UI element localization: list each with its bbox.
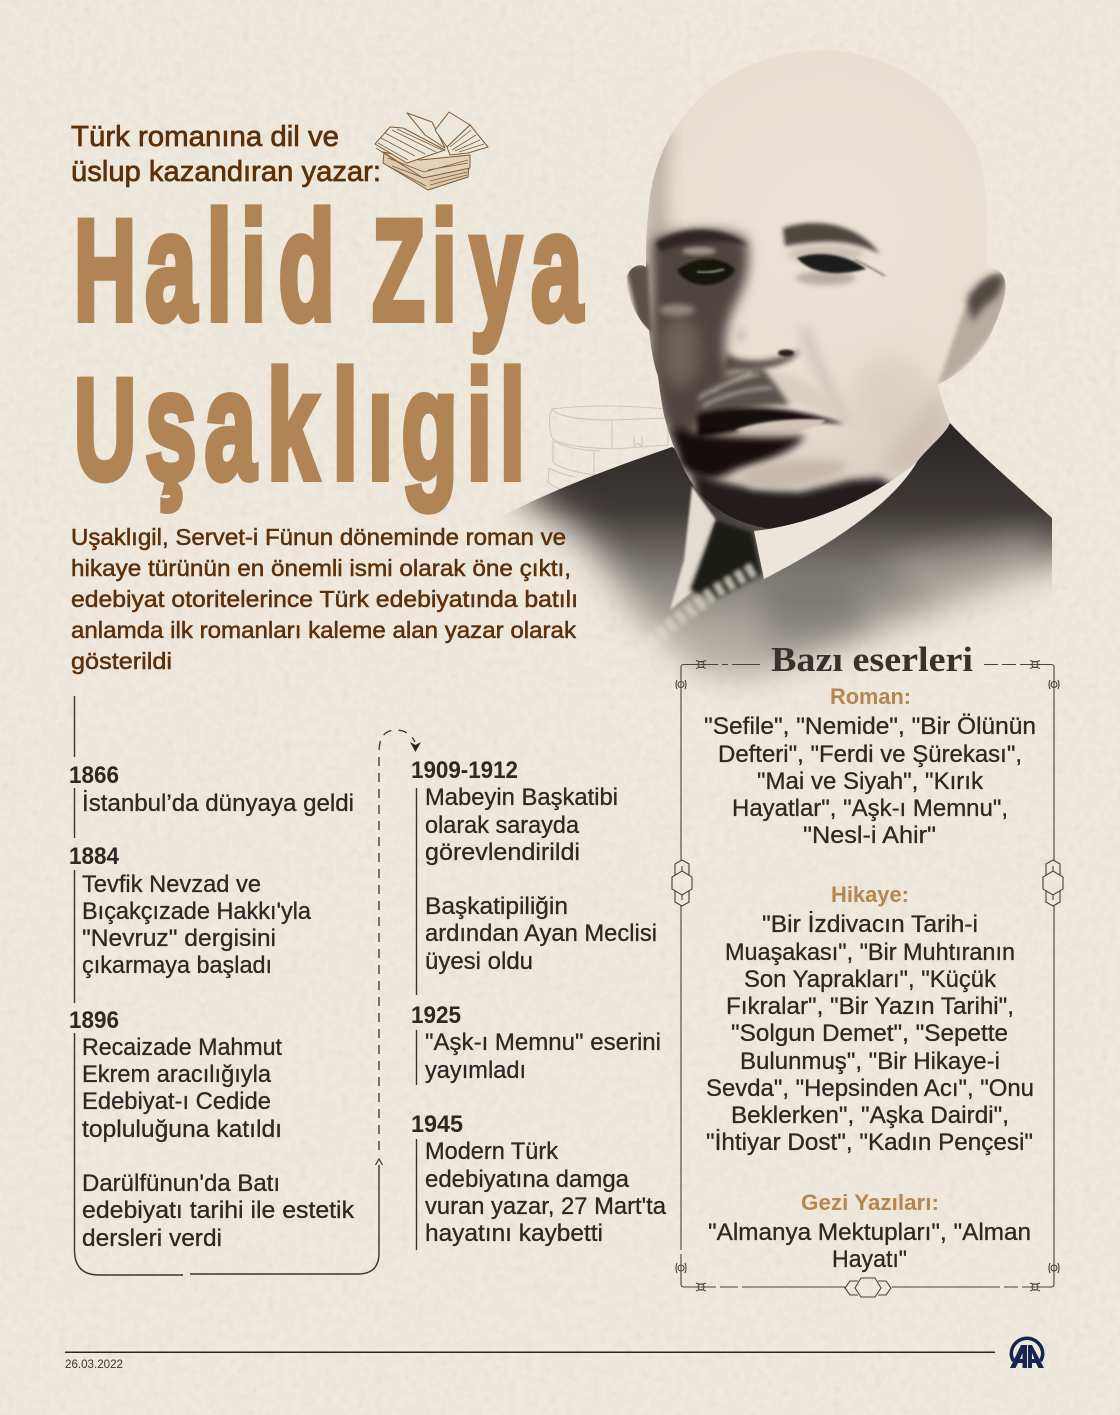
- story list: [706, 882, 1034, 1156]
- neck shade: [886, 394, 948, 472]
- title: Halid Ziya Uşaklıgil: k: [267, 339, 319, 511]
- lead heading: [71, 121, 381, 188]
- story list: "İhtiyar Dost", "Kadın Pençesi": [706, 1129, 1033, 1156]
- left side of face shadow: socket, cheek: [650, 230, 748, 452]
- 1884 entry: 1884: [69, 843, 120, 870]
- timeline column 1: [69, 762, 355, 1252]
- lead heading: Türk romanına dil ve: [71, 121, 339, 153]
- chin and jaw dark: [687, 470, 894, 529]
- title: Halid Ziya Uşaklıgil: a: [145, 180, 198, 352]
- 1909-1912 entry: [411, 757, 657, 975]
- roman list: Defteri", "Ferdi ve Şürekası",: [718, 741, 1022, 768]
- timeline column 2: [411, 757, 667, 1247]
- suit shoulder sheen: [886, 520, 1050, 603]
- story list: Son Yaprakları", "Küçük: [744, 966, 997, 993]
- title: Halid Ziya Uşaklıgil: ş: [145, 339, 197, 511]
- 1945 entry: hayatını kaybetti: [425, 1220, 603, 1247]
- title: Halid Ziya Uşaklıgil: i: [467, 339, 492, 511]
- story list: Bulunmuş", "Bir Hikaye-i: [740, 1048, 1000, 1075]
- title: Halid Ziya Uşaklıgil: H: [74, 190, 136, 350]
- left cheek mid tone: [660, 316, 700, 388]
- works panel: [704, 640, 1036, 1273]
- lower lip: [735, 419, 826, 434]
- right ear inner dark: [967, 275, 1004, 322]
- icon: AA logo: [1010, 1336, 1044, 1368]
- 1866 entry: [69, 762, 354, 817]
- story list: Beklerken", "Aşka Dairdi",: [731, 1102, 1009, 1129]
- title: Halid Ziya Uşaklıgil: ı: [368, 339, 393, 511]
- 1945 entry: vuran yazar, 27 Mart'ta: [425, 1193, 667, 1220]
- 1896 entry: 1896: [69, 1007, 119, 1034]
- title: Halid Ziya Uşaklıgil: i: [241, 180, 266, 352]
- lapel shadow: [760, 575, 880, 665]
- 1909-1912 entry: üyesi oldu: [425, 948, 533, 975]
- left cheek lit patch: [659, 304, 695, 316]
- upper lip dark: [697, 408, 844, 438]
- head and face: [620, 40, 1020, 540]
- 1945 entry: Modern Türk: [425, 1138, 559, 1165]
- 1884 entry: çıkarmaya başladı: [82, 952, 272, 979]
- right page block: [447, 125, 488, 155]
- 1925 entry: yayımladı: [425, 1057, 526, 1084]
- intro paragraph: anlamda ilk romanları kaleme alan yazar olarak: [71, 617, 577, 643]
- top book: [383, 152, 470, 178]
- nasolabial fold: [803, 327, 847, 423]
- title: Halid Ziya Uşaklıgil: U: [74, 349, 136, 509]
- 1945 entry: 1945: [411, 1111, 463, 1138]
- chin lit: [738, 459, 848, 489]
- under lip dark: [672, 428, 805, 479]
- 1909-1912 entry: ardından Ayan Meclisi: [425, 920, 657, 947]
- 1884 entry: Bıçakçızade Hakkı'yla: [82, 898, 312, 925]
- left page block: [375, 127, 445, 163]
- roman list: [704, 684, 1036, 849]
- icon: stack of books: [375, 112, 488, 190]
- smudge near works heading: [680, 622, 790, 678]
- story list: Fıkralar", "Bir Yazın Tarihi",: [726, 993, 1014, 1020]
- roman list: "Mai ve Siyah", "Kırık: [757, 768, 984, 795]
- left eye: [677, 259, 735, 285]
- travel writing list: "Almanya Mektupları", "Alman: [708, 1219, 1031, 1246]
- 1896 entry: Recaizade Mahmut: [82, 1034, 282, 1061]
- 1896 entry: Ekrem aracılığıyla: [82, 1061, 272, 1088]
- upper lid light patch: [682, 247, 716, 255]
- body with fading edges: [506, 423, 1052, 682]
- right eyebrow: [783, 223, 880, 254]
- title: Halid Ziya Uşaklıgil: g: [401, 339, 458, 511]
- left eyebrow: [656, 230, 748, 252]
- timeline connector line: [74, 696, 416, 1275]
- bottom ornament: [845, 1278, 891, 1297]
- date: 26.03.2022: [65, 1359, 123, 1371]
- icon: dashed arrow head: [410, 742, 421, 752]
- story list: Sevda", "Hepsinden Acı", "Onu: [706, 1075, 1034, 1102]
- cheek soft shade: [852, 356, 926, 434]
- right ear: [938, 274, 1006, 385]
- open sheets: [407, 113, 445, 148]
- tie knot: [690, 520, 762, 600]
- title: Halid Ziya Uşaklıgil: l: [499, 339, 525, 511]
- 1909-1912 entry: olarak sarayda: [425, 812, 580, 839]
- shirt collar: [754, 462, 917, 579]
- title: Halid Ziya Uşaklıgil: Z: [372, 190, 425, 350]
- 1884 entry: Tevfik Nevzad ve: [82, 871, 261, 898]
- 1896 entry: Darülfünun'da Batı: [82, 1170, 280, 1197]
- nose underside: [724, 350, 800, 371]
- 1945 entry: edebiyatına damga: [425, 1166, 630, 1193]
- 1896 entry: [69, 1007, 355, 1252]
- 1884 entry: [69, 843, 312, 979]
- roman list: "Nesl-i Ahir": [803, 822, 936, 849]
- bottom book: [383, 152, 469, 190]
- mustache: [696, 366, 792, 412]
- left collar: [670, 486, 716, 610]
- title: Halid Ziya Uşaklıgil: y: [470, 180, 521, 352]
- title: Halid Ziya Uşaklıgil: [74, 180, 583, 511]
- footer rule: [65, 1352, 995, 1353]
- 1925 entry: "Aşk-ı Memnu" eserini: [425, 1029, 661, 1056]
- story list: Muaşakası", "Bir Muhtıranın: [725, 939, 1015, 966]
- story list: "Bir İzdivacın Tarih-i: [762, 911, 978, 938]
- travel writing list: Gezi Yazıları:: [801, 1190, 939, 1215]
- left ornament: [672, 860, 692, 906]
- title: Halid Ziya Uşaklıgil: i: [431, 180, 457, 352]
- title: Halid Ziya Uşaklıgil: l: [206, 180, 232, 352]
- stubble upper lip: [772, 372, 828, 412]
- 1945 entry: [411, 1111, 667, 1247]
- 1909-1912 entry: 1909-1912: [411, 757, 518, 784]
- travel writing list: Hayatı": [832, 1246, 907, 1273]
- ornamental frame: [672, 660, 1063, 1297]
- 1909-1912 entry: görevlendirildi: [425, 839, 580, 866]
- nose highlight: [735, 327, 747, 343]
- intro paragraph: edebiyat otoritelerince Türk edebiyatında batılı: [71, 586, 578, 612]
- 1896 entry: edebiyatı tarihi ile estetik: [82, 1197, 355, 1224]
- 1896 entry: Edebiyat-ı Cedide: [82, 1088, 271, 1115]
- 1884 entry: "Nevruz" dergisini: [82, 925, 276, 952]
- 1896 entry: topluluğuna katıldı: [82, 1116, 282, 1143]
- 1925 entry: 1925: [411, 1002, 461, 1029]
- right eye: [797, 254, 866, 273]
- portrait photo of Halid Ziya Uşaklıgil: [495, 40, 1052, 720]
- works heading: Bazı eserleri: [771, 640, 973, 679]
- intro paragraph: hikaye türünün en önemli ismi olarak öne çıktı,: [71, 555, 571, 581]
- tie pattern: [650, 560, 760, 640]
- intro paragraph: [71, 524, 578, 674]
- nostril: [778, 350, 794, 356]
- title: Halid Ziya Uşaklıgil: a: [531, 180, 583, 352]
- lead heading: üslup kazandıran yazar:: [71, 156, 381, 188]
- intro paragraph: gösterildi: [71, 648, 172, 674]
- 1909-1912 entry: Başkatipiliğin: [425, 893, 568, 920]
- 1866 entry: 1866: [69, 762, 119, 789]
- travel writing list: [708, 1190, 1031, 1273]
- right under-eye: [796, 271, 856, 285]
- story list: "Solgun Demet", "Sepette: [731, 1020, 1008, 1047]
- decorative faded books behind portrait: [548, 406, 668, 490]
- right ornament: [1043, 860, 1063, 906]
- left ear: [625, 264, 652, 335]
- 1896 entry: dersleri verdi: [82, 1225, 222, 1252]
- title: Halid Ziya Uşaklıgil: d: [278, 180, 335, 352]
- intro paragraph: Uşaklıgil, Servet-i Fünun döneminde roman ve: [71, 524, 566, 550]
- left temple shade: [645, 130, 672, 285]
- title: Halid Ziya Uşaklıgil: a: [205, 339, 257, 511]
- roman list: Hayatlar", "Aşk-ı Memnu",: [732, 795, 1008, 822]
- corner knots: [676, 660, 1059, 1291]
- 1925 entry: [411, 1002, 661, 1084]
- roman list: Roman:: [830, 684, 911, 709]
- title: Halid Ziya Uşaklıgil: l: [332, 339, 358, 511]
- 1866 entry: İstanbul’da dünyaya geldi: [82, 790, 354, 817]
- suit and shoulders: [506, 423, 1052, 680]
- story list: Hikaye:: [831, 882, 909, 907]
- roman list: "Sefile", "Nemide", "Bir Ölünün: [704, 713, 1036, 740]
- right upper lid shade: [788, 245, 864, 263]
- 1909-1912 entry: Mabeyin Başkatibi: [425, 784, 618, 811]
